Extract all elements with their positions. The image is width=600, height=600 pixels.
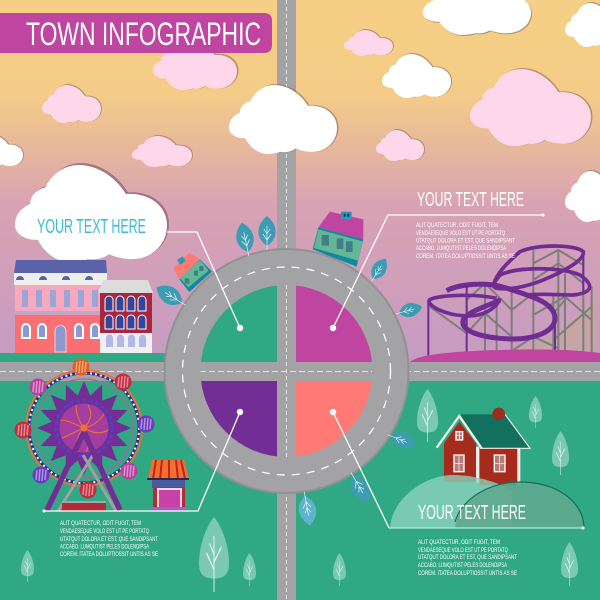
red house on hills: [437, 408, 530, 485]
text block: top right: COREM. ITATEA DOLUPTIOSSIT UNTIS AS SE: [416, 253, 515, 260]
ferris wheel: [14, 358, 154, 511]
speech cloud: [15, 163, 169, 262]
text block: bottom left: [60, 520, 158, 558]
leaves: [152, 216, 424, 527]
text block: bottom right: [418, 539, 517, 577]
text block: bottom left: COREM. ITATEA DOLUPTIOSSIT UNTIS AS SE: [60, 551, 158, 558]
callout line: magenta: [330, 214, 544, 331]
quadrant: magenta: [296, 285, 373, 362]
heading: bottom right: YOUR TEXT HERE: [418, 502, 526, 524]
green ground: [0, 380, 600, 600]
text block: top right: UTATQUT DOLORA ET EST, QUE SANDIPSANT: [416, 238, 515, 244]
clouds: [0, 0, 600, 222]
text block: bottom right: COREM. ITATEA DOLUPTIOSSIT UNTIS AS SE: [418, 570, 517, 577]
large house on ring: [313, 212, 363, 267]
text block: bottom left: VENDAESEQUE VOLO EST UT PE PORTATQ: [60, 528, 149, 535]
red building: [98, 280, 153, 353]
text block: bottom right: ACCABO. LUMQUTIST PELES DOLENDIPSA: [418, 562, 507, 569]
sky background: [0, 0, 600, 362]
inner cross road: [200, 285, 372, 457]
text block: top right: ACCABO. LUMQUTIST PELES DOLENDIPSA: [416, 245, 506, 252]
callout line: salmon: [330, 409, 584, 530]
shop: [147, 460, 189, 512]
quadrant: salmon: [296, 381, 373, 458]
title banner: [0, 13, 272, 53]
pink building: [14, 260, 107, 353]
title banner: TOWN INFOGRAPHIC: [26, 16, 261, 52]
small house on ring: [173, 253, 212, 292]
quadrant: purple: [200, 381, 277, 458]
text block: top right: ALIT QUATECTUR, ODIT FUGIT, TEM: [416, 222, 498, 229]
roller coaster: [428, 246, 597, 357]
text block: bottom right: VENDAESEQUE VOLO EST UT PE PORTATQ: [418, 547, 508, 554]
text block: top right: VENDAESEQUE VOLO EST UT PE PORTATQ: [416, 230, 505, 237]
text block: bottom left: UTATQUT DOLORA ET EST, QUE SANDIPSANT: [60, 536, 158, 543]
trees: [21, 389, 578, 592]
hills: [390, 475, 584, 528]
vertical road: [277, 0, 296, 600]
green strip left: [0, 353, 170, 363]
speech cloud: YOUR TEXT HERE: [37, 216, 146, 238]
magenta hill: [410, 349, 600, 362]
text block: bottom left: ACCABO. LUMQUTIST PELES DOLENDIPSA: [60, 544, 149, 550]
quadrant: green: [200, 285, 277, 362]
callout line: purple: [42, 409, 243, 512]
text block: top right: [416, 222, 515, 260]
wheel legs: [47, 432, 120, 511]
centre quadrants: [200, 285, 373, 458]
heading: top right: YOUR TEXT HERE: [417, 189, 524, 211]
horizontal road: [0, 362, 600, 381]
callout line: green: [167, 232, 243, 331]
roundabout ring: [164, 249, 408, 493]
text block: bottom right: ALIT QUATECTUR, ODIT FUGIT, TEM: [418, 539, 500, 546]
text block: bottom left: ALIT QUATECTUR, ODIT FUGIT, TEM: [60, 520, 141, 527]
cabins: [14, 358, 154, 498]
text block: bottom right: UTATQUT DOLORA ET EST, QUE SANDIPSANT: [418, 554, 517, 561]
